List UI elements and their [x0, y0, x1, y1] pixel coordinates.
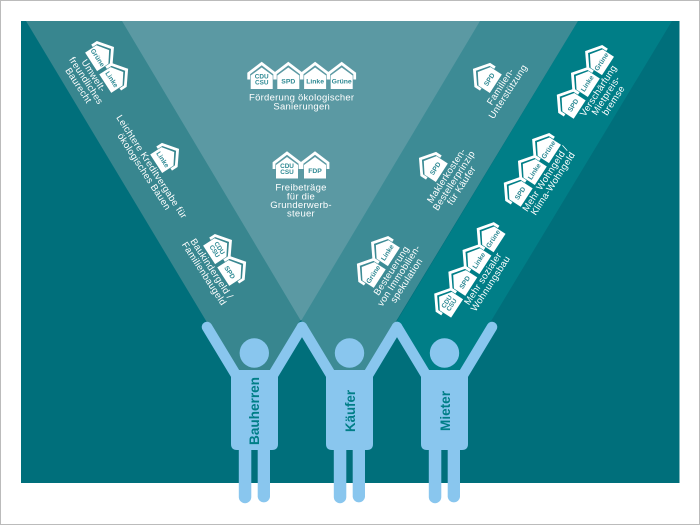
- policy: Leichtere Kreditvergabe für ökologisches Bauen: Linke: [154, 151, 170, 169]
- policy: Förderung ökologischer Sanierungen: [249, 64, 355, 112]
- policy: Baukindergeld / Familienbaugeld: CDU: [212, 241, 226, 256]
- policy: Freibeträge für die Grunderwerbsteuer: FDP: [308, 168, 322, 175]
- policy: Umweltfreundliches Baurecht: Linke: [103, 70, 119, 89]
- policy: Mehr sozialer Wohnungsbau: Linke: [472, 252, 487, 270]
- policy: Familien-Unterstützung: SPD: [483, 72, 497, 88]
- policy: Umweltfreundliches Baurecht: Grüne: [89, 48, 105, 69]
- policy: Förderung ökologischer Sanierungen: CDU: [255, 74, 269, 81]
- policy: Förderung ökologischer Sanierungen: Grüne: [332, 78, 352, 86]
- policy: Besteuerung von Immobilienspekulation: Besteuerung: [372, 244, 412, 298]
- policy: Verschärfung Mietpreisbremse: bremse: [600, 84, 628, 118]
- policy: Baukindergeld / Familienbaugeld: [179, 221, 258, 308]
- policy: Mehr Wohngeld / Klima-Wohngeld: Linke: [527, 162, 543, 181]
- policy: Besteuerung von Immobilienspekulation: Linke: [380, 244, 396, 262]
- figure: Käufer: [302, 327, 397, 503]
- policy: Verschärfung Mietpreisbremse: Linke: [580, 74, 596, 93]
- policy: Mehr sozialer Wohnungsbau: Grüne: [485, 229, 502, 250]
- policy: Mehr sozialer Wohnungsbau: CSU: [445, 297, 459, 313]
- policy: Baukindergeld / Familienbaugeld: CSU: [208, 244, 221, 259]
- policy: Freibeträge für die Grunderwerbsteuer: [270, 153, 332, 220]
- policy: Maklerkosten-Bestellerprinzip für Käufer: Maklerkosten-: [425, 147, 469, 205]
- policy: Mehr Wohngeld / Klima-Wohngeld: [498, 129, 579, 220]
- policy: Umweltfreundliches Baurecht: Umwelt-: [79, 58, 108, 94]
- policy: Leichtere Kreditvergabe für ökologisches Bauen: [106, 99, 211, 226]
- figure: Mieter: Mieter: [437, 390, 453, 431]
- policy: Baukindergeld / Familienbaugeld: SPD: [222, 265, 236, 281]
- policy: Freibeträge für die Grunderwerbsteuer: für die: [287, 192, 315, 202]
- policy: Freibeträge für die Grunderwerbsteuer: Freibeträge: [275, 182, 327, 194]
- policy: Mehr Wohngeld / Klima-Wohngeld: SPD: [514, 186, 528, 202]
- policy: Förderung ökologischer Sanierungen: Förderung ökologischer: [249, 92, 354, 104]
- light beam: Mieter: [397, 21, 672, 399]
- policy: Umweltfreundliches Baurecht: [59, 36, 134, 112]
- policy: Familien-Unterstützung: Unterstützung: [487, 63, 530, 121]
- policy: Freibeträge für die Grunderwerbsteuer: CDU: [280, 163, 294, 170]
- policy: Umweltfreundliches Baurecht: freundliches: [66, 55, 105, 107]
- figure: Bauherren: Bauherren: [246, 377, 262, 445]
- policy: Maklerkosten-Bestellerprinzip für Käufer: Bestellerprinzip: [431, 149, 478, 213]
- policy: Leichtere Kreditvergabe für ökologisches Bauen: ökologisches Bauen: [115, 131, 173, 212]
- policy: Förderung ökologischer Sanierungen: Sanierungen: [273, 102, 330, 112]
- policy: Mehr Wohngeld / Klima-Wohngeld: Klima-Wohngeld: [529, 150, 578, 218]
- policy: Verschärfung Mietpreisbremse: [551, 41, 640, 137]
- policy: Besteuerung von Immobilienspekulation: Grüne: [365, 264, 382, 285]
- policy: Freibeträge für die Grunderwerbsteuer: CSU: [280, 169, 294, 176]
- policy: Verschärfung Mietpreisbremse: SPD: [567, 98, 581, 114]
- policy: Mehr sozialer Wohnungsbau: Mehr sozialer: [462, 251, 504, 307]
- policy: Baukindergeld / Familienbaugeld: Familienbaugeld: [179, 240, 228, 308]
- policy: Maklerkosten-Bestellerprinzip für Käufer: SPD: [429, 161, 443, 177]
- policy: Maklerkosten-Bestellerprinzip für Käufer: [402, 130, 485, 218]
- policy: Mehr Wohngeld / Klima-Wohngeld: Grüne: [541, 140, 558, 160]
- light beam overlap: centre: [122, 21, 480, 321]
- policy: Familien-Unterstützung: Familien-: [485, 67, 517, 107]
- figure: Käufer: Käufer: [342, 389, 358, 432]
- policy: Familien-Unterstützung: [457, 44, 530, 121]
- light beam: Käufer: [122, 21, 578, 399]
- policy: Mehr sozialer Wohnungsbau: Wohnungsbau: [469, 254, 513, 314]
- policy: Besteuerung von Immobilienspekulation: von Immobilien-: [376, 243, 423, 309]
- policy: Förderung ökologischer Sanierungen: CSU: [255, 80, 269, 86]
- policy: Verschärfung Mietpreisbremse: Mietpreis-: [590, 74, 623, 117]
- policy: Förderung ökologischer Sanierungen: SPD: [281, 78, 295, 86]
- policy: Förderung ökologischer Sanierungen: Linke: [306, 78, 324, 86]
- policy: Verschärfung Mietpreisbremse: Verschärfung: [578, 63, 620, 119]
- policy: Mehr Wohngeld / Klima-Wohngeld: Mehr Wohngeld /: [521, 144, 571, 214]
- policy: Mehr sozialer Wohnungsbau: [429, 218, 524, 331]
- policy: Leichtere Kreditvergabe für ökologisches Bauen: Leichtere Kreditvergabe für: [113, 113, 189, 221]
- figure: Bauherren: [207, 327, 302, 503]
- policy: Maklerkosten-Bestellerprinzip für Käufer: für Käufer: [445, 164, 479, 207]
- policy: Baukindergeld / Familienbaugeld: Baukindergeld /: [188, 237, 235, 301]
- policy: Mehr sozialer Wohnungsbau: SPD: [459, 275, 472, 291]
- policy: Besteuerung von Immobilienspekulation: spekulation: [389, 257, 425, 305]
- policy: Freibeträge für die Grunderwerbsteuer: Grunderwerb-: [270, 200, 332, 211]
- policy: Mehr sozialer Wohnungsbau: CDU: [440, 294, 454, 310]
- policy: Umweltfreundliches Baurecht: Baurecht: [63, 66, 94, 106]
- figure: Mieter: [397, 327, 492, 503]
- policy: Freibeträge für die Grunderwerbsteuer: steuer: [287, 208, 315, 220]
- light beam: Bauherren: [26, 21, 480, 399]
- policy: Verschärfung Mietpreisbremse: Grüne: [594, 52, 611, 72]
- policy: Besteuerung von Immobilienspekulation: [346, 224, 431, 314]
